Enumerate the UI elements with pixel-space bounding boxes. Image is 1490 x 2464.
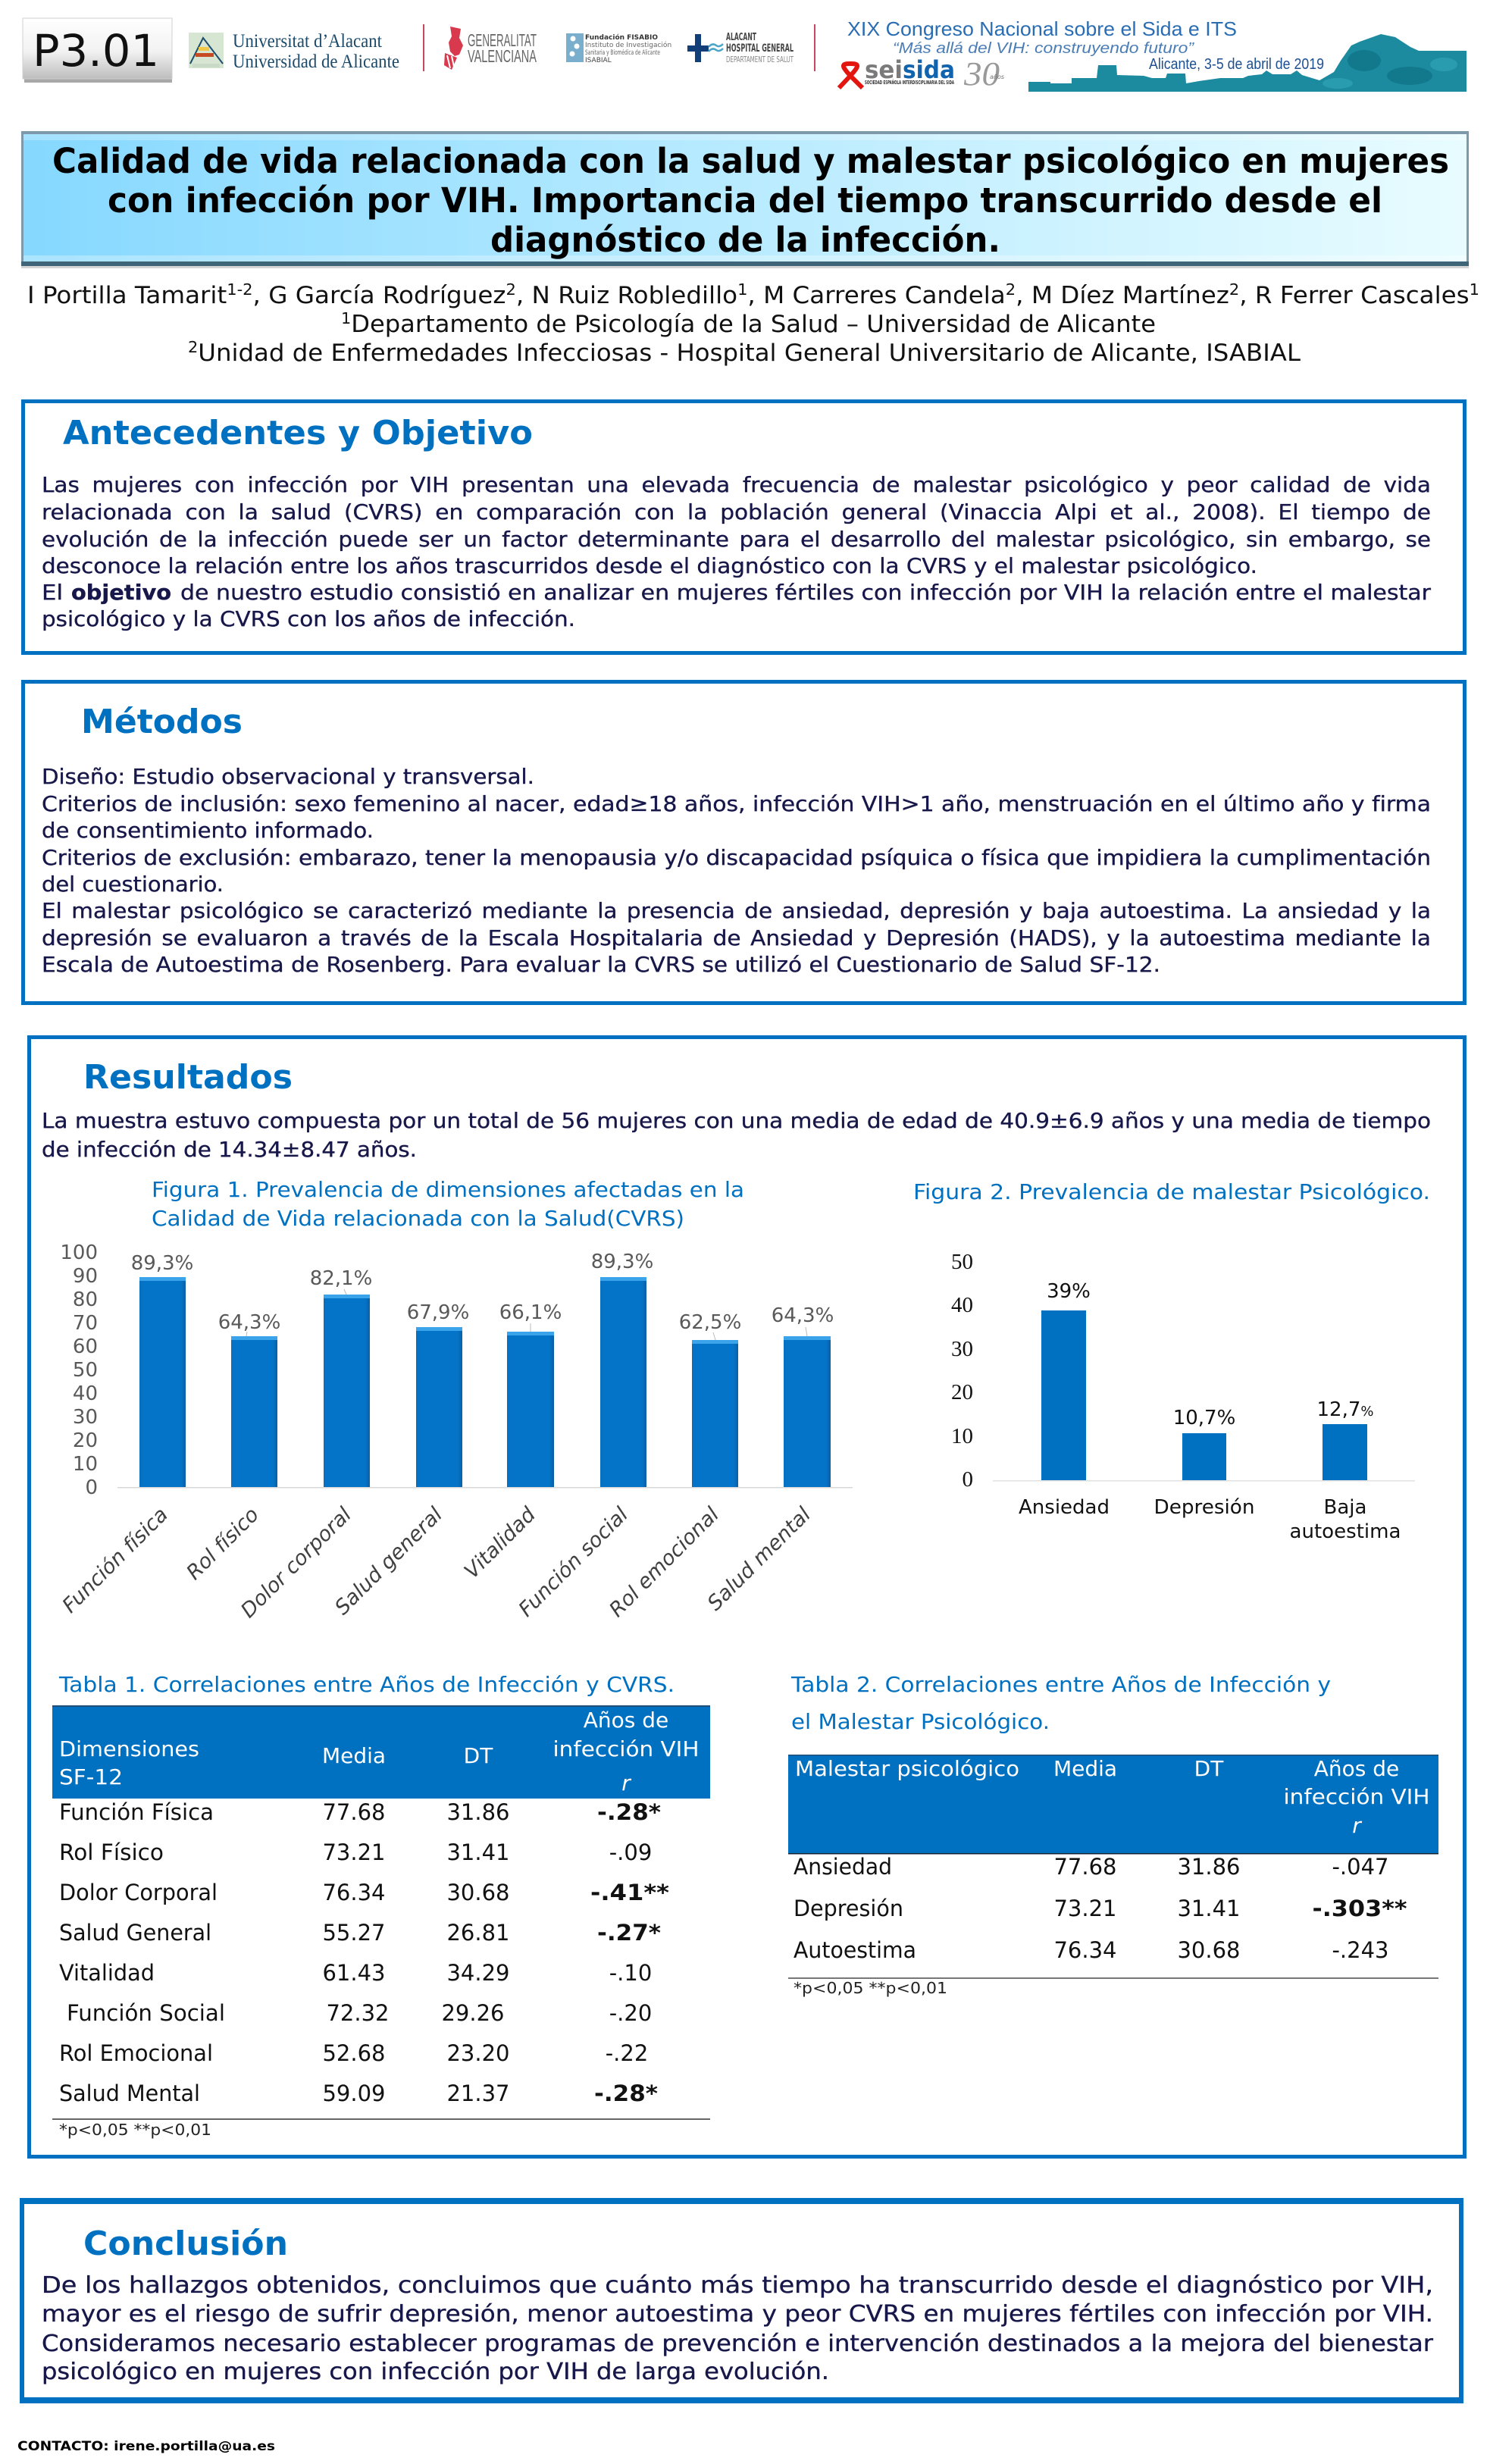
table 1 rows: 52.68 bbox=[322, 2040, 386, 2066]
seisida logo: sida bbox=[903, 55, 955, 84]
title banner bbox=[21, 131, 1469, 268]
body text: psicológico en mujeres con infección por VIH de larga evolución. bbox=[42, 2359, 829, 2385]
bar chart: figura 1: 30 bbox=[73, 1406, 98, 1429]
table 1 rows: 61.43 bbox=[322, 1960, 386, 1986]
logo: Hospital General Alacant: ALACANT bbox=[726, 32, 756, 43]
body text bbox=[42, 764, 1431, 977]
heading: Resultados bbox=[83, 1058, 293, 1097]
bar chart: figura 2: 10 bbox=[951, 1424, 973, 1448]
body text: Escala de Autoestima de Rosenberg. Para evaluar la CVRS se utilizó el Cuestionario de Salud SF-12. bbox=[42, 952, 1160, 977]
bar chart: figura 2: 40 bbox=[951, 1293, 973, 1317]
congress banner: XIX Congreso Nacional sobre el Sida e ITS bbox=[847, 17, 1237, 40]
results intro text: de infección de 14.34±8.47 años. bbox=[42, 1137, 417, 1162]
bar chart: figura 1: 50 bbox=[73, 1359, 98, 1382]
authors and affiliations: , R Ferrer Cascales bbox=[1239, 282, 1470, 309]
bar chart: figura 2 bbox=[951, 1250, 1415, 1543]
bar chart: figura 1: 70 bbox=[73, 1312, 98, 1335]
table 2 rows: -.047 bbox=[1332, 1854, 1389, 1880]
table 1 rows: 76.34 bbox=[322, 1880, 386, 1905]
table 1 rows: 26.81 bbox=[446, 1920, 510, 1946]
table 1 rows: Función Física bbox=[59, 1799, 214, 1825]
authors and affiliations: , M Díez Martínez bbox=[1016, 282, 1229, 309]
table 2 caption: Tabla 2. Correlaciones entre Años de Infección y bbox=[790, 1672, 1331, 1697]
figure 2 caption: Figura 2. Prevalencia de malestar Psicológico. bbox=[913, 1179, 1430, 1204]
logo: Fundación FISABIO bbox=[566, 33, 671, 64]
table 1 rows: -.41** bbox=[590, 1880, 669, 1905]
logo: Hospital General Alacant: DEPARTAMENT DE SALUT bbox=[726, 55, 794, 64]
table 1 rows: Rol Emocional bbox=[59, 2040, 213, 2066]
logo: Fundación FISABIO: Instituto de Investigación bbox=[585, 41, 671, 49]
authors and affiliations: , G García Rodríguez bbox=[253, 282, 506, 309]
table 2 rows: 31.86 bbox=[1177, 1854, 1241, 1880]
bar chart: figura 2: autoestima bbox=[1290, 1520, 1401, 1543]
table 1 header: Media bbox=[322, 1743, 386, 1768]
table 1 rows: -.10 bbox=[609, 1960, 652, 1986]
bar chart: figura 2: 10,7% bbox=[1173, 1407, 1235, 1429]
logo: Hospital General Alacant: HOSPITAL GENERAL bbox=[726, 42, 794, 55]
skyline bbox=[1028, 34, 1467, 92]
body text: relacionada con la salud (CVRS) en comparación con la población general (Vinaccia Alpi et al., 2008). El tiempo de bbox=[42, 499, 1431, 524]
panel: métodos bbox=[23, 682, 1464, 1003]
table 1 rows: 31.41 bbox=[446, 1839, 510, 1865]
table 2 rows: -.243 bbox=[1332, 1937, 1389, 1963]
table 2 header: DT bbox=[1194, 1756, 1224, 1781]
table 1 rows: 29.26 bbox=[441, 2000, 505, 2026]
table 2 header: Malestar psicológico bbox=[795, 1756, 1019, 1781]
body text: de consentimiento informado. bbox=[42, 818, 374, 843]
logo: Fundación FISABIO: ISABIAL bbox=[585, 57, 612, 64]
bar chart: figura 2: 0 bbox=[963, 1467, 973, 1492]
authors and affiliations: , M Carreres Candela bbox=[747, 282, 1006, 309]
table 2 caption bbox=[790, 1672, 1331, 1734]
table 1 header: r bbox=[621, 1771, 631, 1796]
table 1 rows: -.22 bbox=[606, 2040, 648, 2066]
bar chart: figura 1: Vitalidad bbox=[460, 1502, 541, 1583]
table 2 header: Años de bbox=[1314, 1756, 1399, 1781]
body text: evolución de la infección puede ser un factor determinante para el desarrollo del malestar psicológico, sin embargo, se bbox=[42, 527, 1431, 552]
table 1 rows: 30.68 bbox=[446, 1880, 510, 1905]
logo: Universidad de Alicante: Universitat d’Alacant bbox=[233, 31, 382, 52]
bar chart: figura 1: Rol físico bbox=[182, 1503, 264, 1585]
bar chart: figura 1 bbox=[58, 1241, 853, 1623]
panel: antecedentes y objetivo bbox=[23, 402, 1464, 653]
congress banner: “Más allá del VIH: construyendo futuro” bbox=[893, 40, 1195, 57]
table 2 header: infección VIH bbox=[1284, 1784, 1429, 1809]
body text: El malestar psicológico se caracterizó mediante la presencia de ansiedad, depresión y baja autoestima. La ansiedad y la bbox=[42, 898, 1431, 923]
body text: mayor es el riesgo de sufrir depresión, menor autoestima y peor CVRS en mujeres fértiles con infección por VIH. bbox=[42, 2301, 1433, 2328]
table 2 rows: Ansiedad bbox=[794, 1854, 892, 1880]
table 1 rows bbox=[59, 1799, 669, 2106]
table 1 rows: 23.20 bbox=[446, 2040, 510, 2066]
body text: objetivo bbox=[71, 580, 171, 605]
poster code badge bbox=[23, 18, 172, 83]
body text: Las mujeres con infección por VIH presentan una elevada frecuencia de malestar psicológico y peor calidad de vida bbox=[42, 472, 1431, 497]
logo: Fundación FISABIO: Sanitaria y Biomédica de Alicante bbox=[585, 49, 660, 57]
body text: de nuestro estudio consistió en analizar en mujeres fértiles con infección por VIH la relación entre el malestar bbox=[180, 580, 1432, 605]
table 1 rows: -.09 bbox=[609, 1839, 652, 1865]
authors and affiliations: 1 bbox=[1470, 280, 1479, 299]
authors and affiliations bbox=[27, 280, 1479, 367]
title banner: diagnóstico de la infección. bbox=[490, 220, 1000, 260]
authors and affiliations: 2 bbox=[506, 280, 516, 299]
table 2 rows: Autoestima bbox=[794, 1937, 916, 1963]
logo: Hospital General Alacant bbox=[687, 32, 794, 64]
bar chart: figura 2: Depresión bbox=[1153, 1496, 1255, 1519]
authors and affiliations: 2 bbox=[1229, 280, 1239, 299]
bar chart: figura 1: Función social bbox=[515, 1503, 633, 1621]
table 1: correlaciones CVRS bbox=[52, 1672, 710, 2139]
bar chart: figura 2: Ansiedad bbox=[1019, 1496, 1110, 1519]
body text: Diseño: Estudio observacional y transversal. bbox=[42, 764, 534, 789]
table 1 header: DT bbox=[464, 1743, 493, 1768]
bar chart: figura 1: 90 bbox=[73, 1265, 98, 1288]
table 1 rows: -.27* bbox=[597, 1920, 661, 1946]
body text: del cuestionario. bbox=[42, 872, 224, 897]
heading: Antecedentes y Objetivo bbox=[63, 414, 533, 452]
congress banner bbox=[839, 17, 1467, 92]
panel: resultados bbox=[29, 1037, 1464, 2157]
contact line: CONTACTO: irene.portilla@ua.es bbox=[17, 2439, 275, 2454]
bar chart: figura 1: 20 bbox=[73, 1429, 98, 1452]
table 1 rows: Función Social bbox=[67, 2000, 225, 2026]
seisida logo: 30 bbox=[963, 55, 1000, 92]
table 2 rows: 73.21 bbox=[1053, 1896, 1117, 1921]
bar chart: figura 1: 64,3% bbox=[772, 1304, 834, 1327]
logo: Fundación FISABIO: Fundación FISABIO bbox=[585, 33, 658, 42]
bar chart: figura 2: 12,7% bbox=[1317, 1398, 1373, 1421]
table 1 rows: 72.32 bbox=[326, 2000, 390, 2026]
authors and affiliations: 1 bbox=[341, 309, 351, 327]
table 1 rows: Dolor Corporal bbox=[59, 1880, 218, 1905]
authors and affiliations: 1 bbox=[737, 280, 747, 299]
bar chart: figura 2: 50 bbox=[951, 1250, 973, 1274]
body text: El bbox=[42, 580, 63, 605]
table 2 header: r bbox=[1352, 1813, 1362, 1838]
seisida logo: años bbox=[990, 74, 1004, 80]
body text: Criterios de inclusión: sexo femenino al nacer, edad≥18 años, infección VIH>1 año, menstruación en el último año y firma bbox=[42, 791, 1431, 816]
table 2 footnote: *p<0,05 **p<0,01 bbox=[794, 1979, 947, 1997]
logo: Universidad de Alicante: Universidad de Alicante bbox=[233, 52, 399, 72]
table 1 rows: 31.86 bbox=[446, 1799, 510, 1825]
figure 1 caption bbox=[152, 1177, 744, 1231]
table 1 rows: 34.29 bbox=[446, 1960, 510, 1986]
bar chart: figura 1: 66,1% bbox=[499, 1301, 562, 1324]
congress banner: Alicante, 3-5 de abril de 2019 bbox=[1149, 56, 1324, 73]
logo: Generalitat Valenciana bbox=[444, 27, 537, 70]
bar chart: figura 1: 82,1% bbox=[310, 1267, 372, 1290]
authors and affiliations: Unidad de Enfermedades Infecciosas - Hospital General Universitario de Alicante, ISABIAL bbox=[198, 340, 1301, 367]
bar chart: figura 1: 89,3% bbox=[591, 1251, 653, 1273]
table 1 rows: 21.37 bbox=[446, 2080, 510, 2106]
table 1 rows: -.28* bbox=[594, 2080, 658, 2106]
body text bbox=[42, 2272, 1434, 2385]
table 1 rows: Salud General bbox=[59, 1920, 211, 1946]
seisida logo bbox=[839, 55, 1004, 92]
authors and affiliations: Departamento de Psicología de la Salud – Universidad de Alicante bbox=[351, 311, 1156, 338]
table 1 caption: Tabla 1. Correlaciones entre Años de Infección y CVRS. bbox=[58, 1672, 675, 1697]
seisida logo: sei bbox=[865, 55, 903, 84]
body text bbox=[42, 472, 1432, 631]
bar chart: figura 1: Dolor corporal bbox=[236, 1503, 356, 1623]
bar chart: figura 1: 100 bbox=[60, 1241, 98, 1264]
figure 1 caption: Calidad de Vida relacionada con la Salud(CVRS) bbox=[152, 1206, 684, 1231]
bar chart: figura 1: 10 bbox=[73, 1453, 98, 1476]
logo: Generalitat Valenciana: VALENCIANA bbox=[468, 46, 537, 66]
table 1 rows: Rol Físico bbox=[59, 1839, 164, 1865]
table 2 rows: 30.68 bbox=[1177, 1937, 1241, 1963]
bar chart: figura 2: 30 bbox=[951, 1337, 973, 1361]
title banner: con infección por VIH. Importancia del tiempo transcurrido desde el bbox=[108, 180, 1382, 221]
table 1 header: Años de bbox=[584, 1708, 668, 1733]
table 2 rows: -.303** bbox=[1313, 1896, 1407, 1921]
figure 1 caption: Figura 1. Prevalencia de dimensiones afectadas en la bbox=[152, 1177, 744, 1202]
bar chart: figura 1: Salud mental bbox=[703, 1503, 815, 1615]
body text: Consideramos necesario establecer programas de prevención e intervención destinados a la mejora del bienestar bbox=[42, 2331, 1434, 2357]
bar chart: figura 2: Baja bbox=[1324, 1496, 1366, 1519]
table 2 header bbox=[788, 1755, 1438, 1854]
bar chart: figura 1: Rol emocional bbox=[605, 1503, 724, 1622]
table 1 rows: -.20 bbox=[609, 2000, 652, 2026]
heading: Métodos bbox=[81, 703, 243, 741]
bar chart: figura 1: 60 bbox=[73, 1335, 98, 1358]
panel: conclusión bbox=[20, 2198, 1463, 2403]
bar chart: figura 1: 67,9% bbox=[407, 1301, 469, 1324]
heading: Conclusión bbox=[83, 2224, 288, 2263]
table 1 rows: 55.27 bbox=[322, 1920, 386, 1946]
table 2 rows: 31.41 bbox=[1177, 1896, 1241, 1921]
header: poster code and logos bbox=[23, 17, 1467, 92]
table 2 rows bbox=[794, 1854, 1407, 1963]
poster code badge: P3.01 bbox=[33, 25, 159, 77]
authors and affiliations: 1-2 bbox=[227, 280, 253, 299]
bar chart: figura 1: 40 bbox=[73, 1382, 98, 1405]
bar chart: figura 2: 20 bbox=[951, 1380, 973, 1404]
results intro text: La muestra estuvo compuesta por un total de 56 mujeres con una media de edad de 40.9±6.9 años y una media de tiempo bbox=[42, 1108, 1431, 1133]
table 1 header: infección VIH bbox=[553, 1736, 699, 1761]
authors and affiliations: , N Ruiz Robledillo bbox=[516, 282, 737, 309]
table 1 rows: -.28* bbox=[597, 1799, 661, 1825]
body text: Criterios de exclusión: embarazo, tener la menopausia y/o discapacidad psíquica o física que impidiera la cumplimentación bbox=[42, 845, 1431, 870]
table 2 rows: 76.34 bbox=[1053, 1937, 1117, 1963]
authors and affiliations: I Portilla Tamarit bbox=[27, 282, 218, 309]
bar chart: figura 1: 89,3% bbox=[131, 1252, 193, 1275]
body text: desconoce la relación entre los años trascurridos desde el diagnóstico con la CVRS y el malestar psicológico. bbox=[42, 553, 1257, 578]
body text: psicológico y la CVRS con los años de infección. bbox=[42, 606, 575, 631]
body text: De los hallazgos obtenidos, concluimos que cuánto más tiempo ha transcurrido desde el diagnóstico por VIH, bbox=[42, 2272, 1433, 2299]
bar chart: figura 1: Salud general bbox=[330, 1503, 447, 1620]
table 1 rows: Vitalidad bbox=[59, 1960, 155, 1986]
table 1 rows: 73.21 bbox=[322, 1839, 386, 1865]
logo: Universidad de Alicante bbox=[189, 31, 399, 72]
table 2 rows: 77.68 bbox=[1053, 1854, 1117, 1880]
authors and affiliations: 2 bbox=[188, 338, 198, 356]
seisida logo: SOCIEDAD ESPAÑOLA INTERDISCIPLINARIA DEL SIDA bbox=[865, 79, 954, 86]
bar chart: figura 2: 39% bbox=[1047, 1280, 1091, 1303]
bar chart: figura 1: 80 bbox=[73, 1288, 98, 1311]
table 1 header bbox=[52, 1705, 710, 1799]
table 2 rows: Depresión bbox=[794, 1896, 903, 1921]
table 1 header: Dimensiones bbox=[59, 1736, 199, 1761]
table 2 header: Media bbox=[1053, 1756, 1117, 1781]
bar chart: figura 1: 0 bbox=[85, 1476, 98, 1499]
table 1 rows: 77.68 bbox=[322, 1799, 386, 1825]
bar chart: figura 1: Función física bbox=[58, 1503, 173, 1617]
table 1 rows: 59.09 bbox=[322, 2080, 386, 2106]
table 1 rows: Salud Mental bbox=[59, 2080, 200, 2106]
table 2 caption: el Malestar Psicológico. bbox=[791, 1709, 1050, 1734]
bar chart: figura 1: 64,3% bbox=[218, 1311, 280, 1334]
logo: Generalitat Valenciana: GENERALITAT bbox=[468, 30, 537, 50]
table 2: correlaciones malestar psicológico bbox=[788, 1672, 1438, 1997]
table 1 footnote: *p<0,05 **p<0,01 bbox=[59, 2121, 211, 2139]
title banner: Calidad de vida relacionada con la salud y malestar psicológico en mujeres bbox=[52, 141, 1449, 181]
authors and affiliations: 2 bbox=[1006, 280, 1016, 299]
bar chart: figura 1: 62,5% bbox=[679, 1311, 741, 1334]
body text: depresión se evaluaron a través de la Escala Hospitalaria de Ansiedad y Depresión (HADS), y la autoestima mediante la bbox=[42, 925, 1431, 950]
table 1 header: SF-12 bbox=[59, 1764, 123, 1789]
results intro text bbox=[42, 1108, 1431, 1162]
